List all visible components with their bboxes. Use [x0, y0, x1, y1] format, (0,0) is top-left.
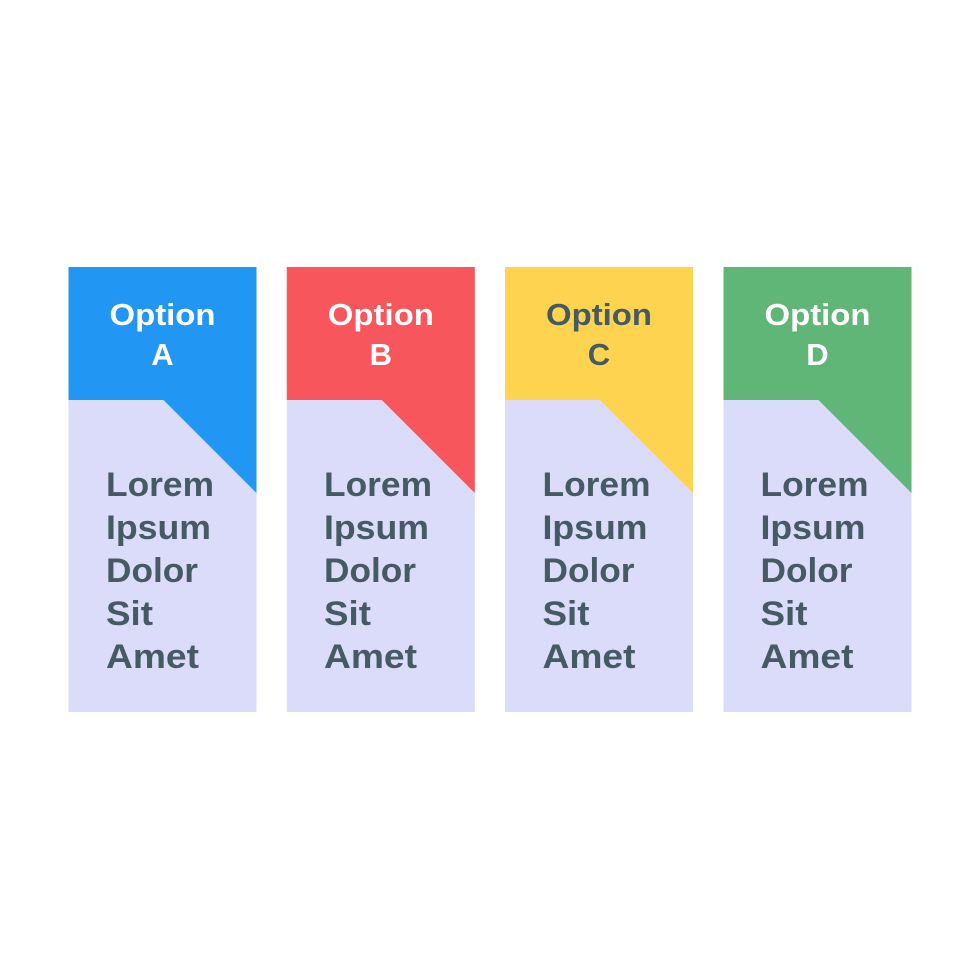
text block: lorem ipsum A: Lorem — [106, 466, 214, 504]
header: option B red banner — [287, 267, 475, 493]
heading: Option A: Option — [110, 297, 216, 332]
heading letter: A: A — [151, 337, 174, 372]
text block: lorem ipsum A: Amet — [106, 638, 199, 676]
text block: lorem ipsum C: Sit — [542, 595, 590, 633]
text block: lorem ipsum C: Ipsum — [542, 509, 648, 547]
heading: Option D: Option — [764, 297, 870, 332]
text block: lorem ipsum D: Sit — [760, 595, 808, 633]
text block: lorem ipsum B: Ipsum — [324, 509, 429, 547]
text block: lorem ipsum D: Dolor — [760, 552, 852, 590]
text block: lorem ipsum B: Lorem — [324, 466, 432, 504]
text block: lorem ipsum C: Dolor — [542, 552, 634, 590]
panel: option C — [505, 267, 693, 712]
text block: lorem ipsum A — [106, 466, 214, 676]
text block: lorem ipsum D: Ipsum — [760, 509, 866, 547]
heading letter: B: B — [370, 337, 392, 372]
heading letter: D: D — [806, 337, 829, 372]
header: option A blue banner — [68, 267, 256, 493]
heading: Option C: Option — [546, 297, 652, 332]
text block: lorem ipsum A: Ipsum — [106, 509, 211, 547]
text block: lorem ipsum C — [542, 466, 650, 676]
panel: option D — [724, 267, 912, 712]
header: option D green banner — [724, 267, 912, 493]
panel: option A — [68, 267, 256, 712]
text block: lorem ipsum C: Amet — [542, 638, 636, 676]
header: option C yellow banner — [505, 267, 693, 493]
text block: lorem ipsum D: Amet — [760, 638, 854, 676]
text block: lorem ipsum B: Dolor — [324, 552, 416, 590]
text block: lorem ipsum A: Dolor — [106, 552, 198, 590]
text block: lorem ipsum D — [760, 466, 868, 676]
text block: lorem ipsum B: Sit — [324, 595, 371, 633]
heading: Option B: Option — [328, 297, 434, 332]
heading letter: C: C — [588, 337, 610, 372]
text block: lorem ipsum B — [324, 466, 432, 676]
text block: lorem ipsum C: Lorem — [542, 466, 650, 504]
text block: lorem ipsum D: Lorem — [760, 466, 868, 504]
panel: option B — [287, 267, 475, 712]
text block: lorem ipsum A: Sit — [106, 595, 153, 633]
text block: lorem ipsum B: Amet — [324, 638, 417, 676]
